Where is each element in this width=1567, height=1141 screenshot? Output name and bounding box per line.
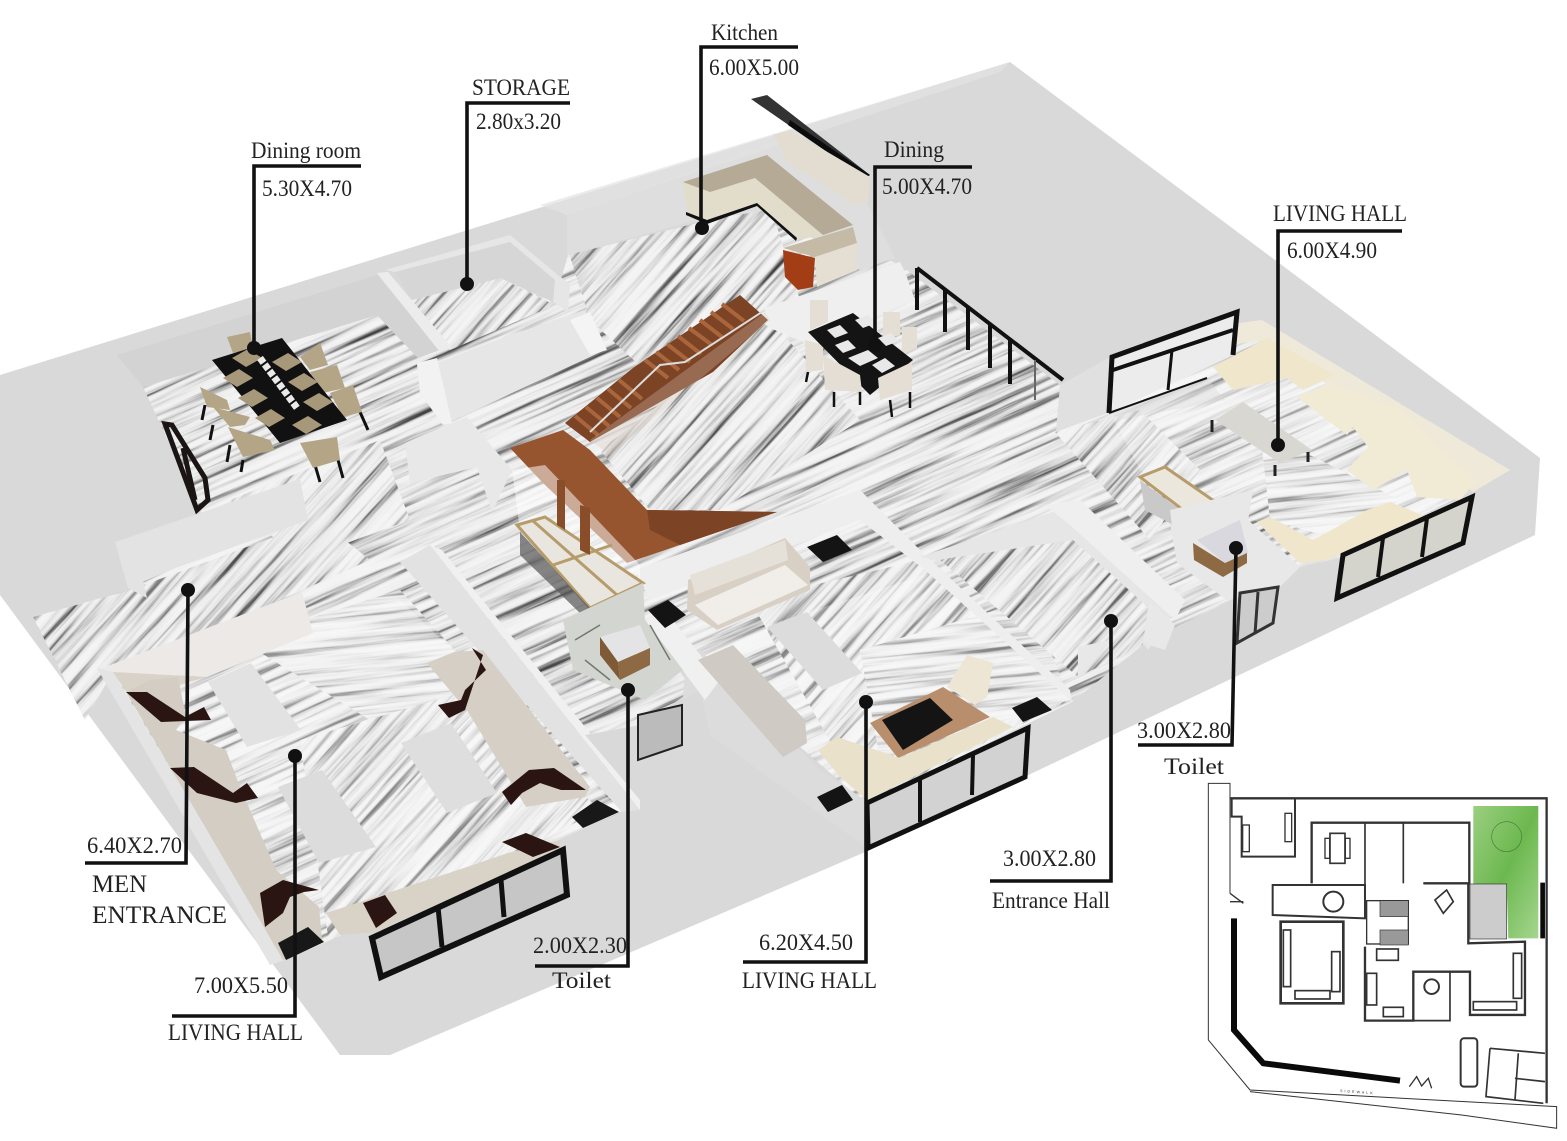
- label: left Living Hall: [168, 749, 303, 1045]
- label: Storage: STORAGE: [472, 75, 570, 100]
- label: right Living Hall: [1271, 201, 1407, 452]
- label: Men Entrance: 6.40X2.70: [87, 833, 182, 858]
- site boundary: [1208, 783, 1557, 1128]
- staircase: [510, 295, 777, 563]
- window: right living hall: [1337, 497, 1472, 598]
- label: Dining room: 5.30X4.70: [262, 176, 352, 201]
- floor plan inset: SIDEWALK: [1340, 1089, 1375, 1095]
- window: dining railing: [917, 268, 1063, 400]
- center living hall furniture: [648, 535, 1052, 812]
- label: right Living Hall: LIVING HALL: [1273, 201, 1407, 226]
- dining room table: [200, 332, 368, 482]
- label: Dining room: [247, 138, 361, 355]
- label: Toilet center: 2.00X2.30: [533, 933, 627, 958]
- label: Dining room: Dining room: [251, 138, 361, 163]
- label: Toilet center: [533, 683, 635, 993]
- label: Storage: [460, 75, 570, 291]
- label: Men Entrance: MEN: [92, 871, 147, 898]
- label: left Living Hall: 7.00X5.50: [194, 973, 288, 998]
- car: [1461, 1038, 1477, 1087]
- label: Entrance Hall: [990, 614, 1118, 913]
- sofas: [1283, 930, 1291, 987]
- label: right Living Hall: 6.00X4.90: [1287, 238, 1377, 263]
- right living hall: [1140, 320, 1510, 577]
- label: Kitchen: Kitchen: [711, 20, 778, 45]
- left living hall furniture: [126, 648, 619, 960]
- label: Dining: 5.00X4.70: [882, 174, 972, 199]
- window: center living hall: [867, 728, 1028, 848]
- label: Entrance Hall: 3.00X2.80: [1003, 846, 1096, 871]
- label: Entrance Hall: Entrance Hall: [992, 888, 1110, 913]
- tables: [1330, 833, 1345, 863]
- walls: [97, 62, 1300, 965]
- label: Men Entrance: ENTRANCE: [92, 902, 227, 929]
- dining table: [805, 300, 917, 417]
- marble floor: [20, 200, 1520, 970]
- toilet vanity: [563, 583, 683, 760]
- label: left Living Hall: LIVING HALL: [168, 1020, 303, 1045]
- label: center Living Hall: LIVING HALL: [742, 968, 877, 993]
- door: toilet right: [1237, 587, 1278, 643]
- label: Toilet center: Toilet: [552, 968, 612, 993]
- label: Storage: 2.80x3.20: [476, 109, 561, 134]
- label: Toilet right: 3.00X2.80: [1137, 718, 1231, 743]
- label: Dining: Dining: [884, 137, 944, 162]
- label: center Living Hall: 6.20X4.50: [759, 930, 853, 955]
- window: left living hall: [372, 850, 567, 977]
- label: Kitchen: [695, 20, 799, 235]
- garden: [1473, 806, 1538, 938]
- label: Dining: [868, 137, 972, 352]
- sink counter: [512, 465, 643, 615]
- label: center Living Hall: [742, 695, 877, 993]
- service: [1486, 1048, 1545, 1103]
- boundary wall: [1234, 918, 1400, 1081]
- label: Kitchen: 6.00X5.00: [709, 55, 799, 80]
- label: Toilet right: Toilet: [1164, 754, 1225, 779]
- kitchen: [683, 95, 870, 290]
- window: rear terrace: [1109, 310, 1237, 420]
- floor plan inset: [1208, 783, 1557, 1128]
- window: dining room door: [165, 424, 208, 510]
- label: Men Entrance: [85, 583, 227, 929]
- label: Toilet right: [1137, 541, 1243, 779]
